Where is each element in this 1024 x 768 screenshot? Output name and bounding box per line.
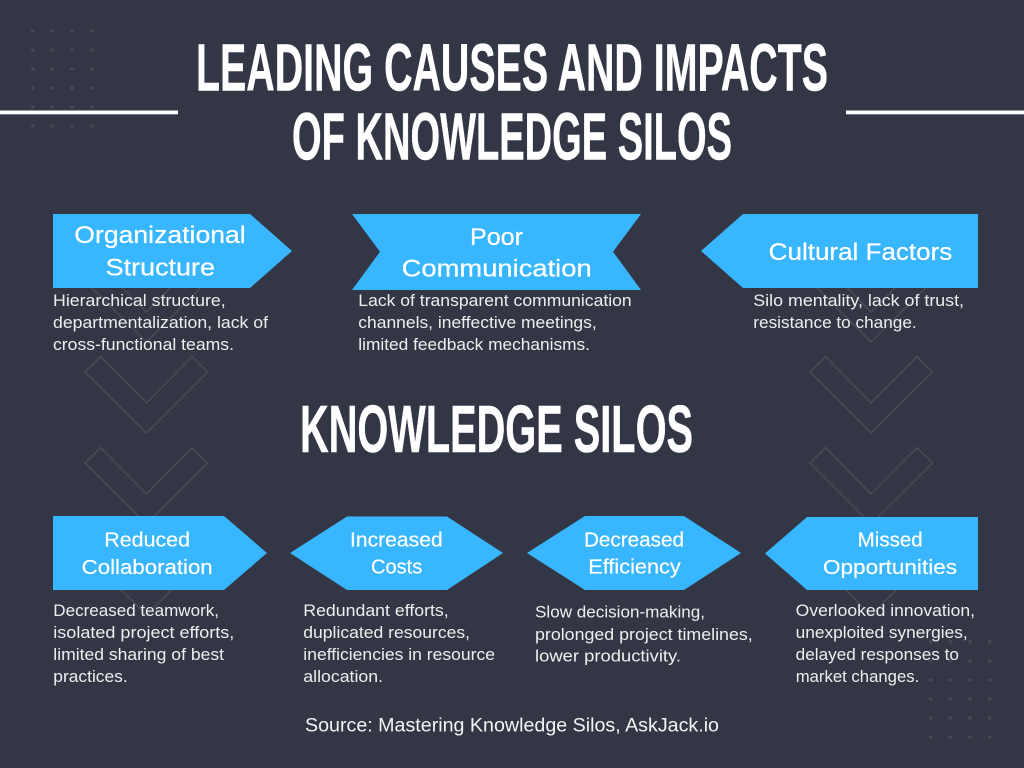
text: missed opportunities description: Overlooked innovation,	[796, 601, 975, 620]
heading: poor communication: Poor	[470, 224, 523, 251]
dot grid: bottom right	[929, 640, 992, 739]
text: increased costs description: allocation.	[303, 667, 383, 686]
heading: increased costs: Increased	[350, 529, 443, 552]
heading: increased costs	[350, 529, 443, 578]
text: reduced collaboration description: limited sharing of best	[53, 645, 224, 664]
panel: cultural factors	[701, 214, 978, 332]
background chevrons: left column	[85, 266, 208, 615]
source line: Source: Mastering Knowledge Silos, AskJack.io	[305, 716, 719, 737]
heading: poor communication: Communication	[402, 256, 592, 283]
text: reduced collaboration description	[53, 601, 234, 686]
heading: reduced collaboration: Collaboration	[82, 556, 213, 579]
text: organizational structure description	[53, 291, 268, 354]
hexagon banner: increased costs	[290, 516, 503, 590]
arrow banner: cultural factors	[701, 214, 978, 288]
heading: decreased efficiency: Efficiency	[588, 556, 681, 578]
text: organizational structure description: departmentalization, lack of	[53, 313, 268, 332]
ribbon banner: poor communication	[352, 214, 641, 290]
hexagon banner: decreased efficiency	[527, 516, 741, 590]
text: reduced collaboration description: isolated project efforts,	[53, 623, 234, 642]
text: decreased efficiency description	[535, 603, 753, 666]
text: missed opportunities description: unexploited synergies,	[796, 623, 968, 642]
text: increased costs description: duplicated resources,	[303, 623, 470, 642]
heading: reduced collaboration: Reduced	[104, 529, 190, 552]
heading: missed opportunities: Opportunities	[823, 556, 957, 579]
heading: organizational structure: Organizational	[74, 222, 246, 249]
panel: organizational structure	[53, 214, 292, 354]
arrow banner: reduced collaboration	[53, 516, 267, 590]
header rule: right	[846, 110, 1024, 114]
text: decreased efficiency description: Slow decision-making,	[535, 603, 705, 622]
text: organizational structure description: Hierarchical structure,	[53, 291, 226, 310]
heading: organizational structure: Structure	[106, 255, 215, 282]
text: increased costs description: Redundant efforts,	[303, 601, 449, 620]
heading: decreased efficiency: Decreased	[584, 529, 684, 552]
heading: missed opportunities	[823, 529, 957, 579]
text: poor communication description: limited feedback mechanisms.	[358, 335, 590, 354]
heading: reduced collaboration	[82, 529, 213, 579]
text: cultural factors description	[753, 291, 964, 332]
heading: cultural factors: Cultural Factors	[769, 239, 952, 266]
heading: missed opportunities: Missed	[858, 529, 923, 552]
arrow banner: missed opportunities	[765, 517, 978, 590]
text: poor communication description: channels, ineffective meetings,	[358, 313, 597, 332]
text: increased costs description: inefficiencies in resource	[303, 645, 495, 664]
central heading: knowledge silos: KNOWLEDGE SILOS	[300, 392, 693, 467]
text: missed opportunities description	[796, 601, 975, 686]
panel: reduced collaboration	[53, 516, 267, 686]
text: decreased efficiency description: lower productivity.	[535, 647, 681, 666]
background chevrons: right column	[810, 266, 932, 615]
text: decreased efficiency description: prolonged project timelines,	[535, 625, 753, 644]
panel: increased costs	[290, 516, 503, 686]
text: organizational structure description: cross-functional teams.	[53, 335, 234, 354]
text: poor communication description: Lack of transparent communication	[358, 291, 632, 310]
arrow banner: organizational structure	[53, 214, 292, 288]
title	[196, 30, 828, 174]
heading: organizational structure	[74, 222, 246, 282]
heading: increased costs: Costs	[371, 556, 422, 578]
text: poor communication description	[358, 291, 632, 354]
text: reduced collaboration description: practices.	[53, 667, 128, 686]
text: cultural factors description: Silo mentality, lack of trust,	[753, 291, 964, 310]
text: missed opportunities description: delayed responses to	[796, 645, 959, 664]
text: missed opportunities description: market changes.	[796, 667, 919, 686]
panel: missed opportunities	[765, 517, 978, 686]
heading: poor communication	[402, 224, 592, 283]
heading: decreased efficiency	[584, 529, 684, 578]
panel: poor communication	[352, 214, 641, 354]
text: cultural factors description: resistance to change.	[753, 313, 917, 332]
dot grid: top left	[31, 29, 93, 128]
text: increased costs description	[303, 601, 495, 686]
header rule: left	[0, 110, 178, 114]
text: reduced collaboration description: Decreased teamwork,	[53, 601, 219, 620]
panel: decreased efficiency	[527, 516, 753, 666]
